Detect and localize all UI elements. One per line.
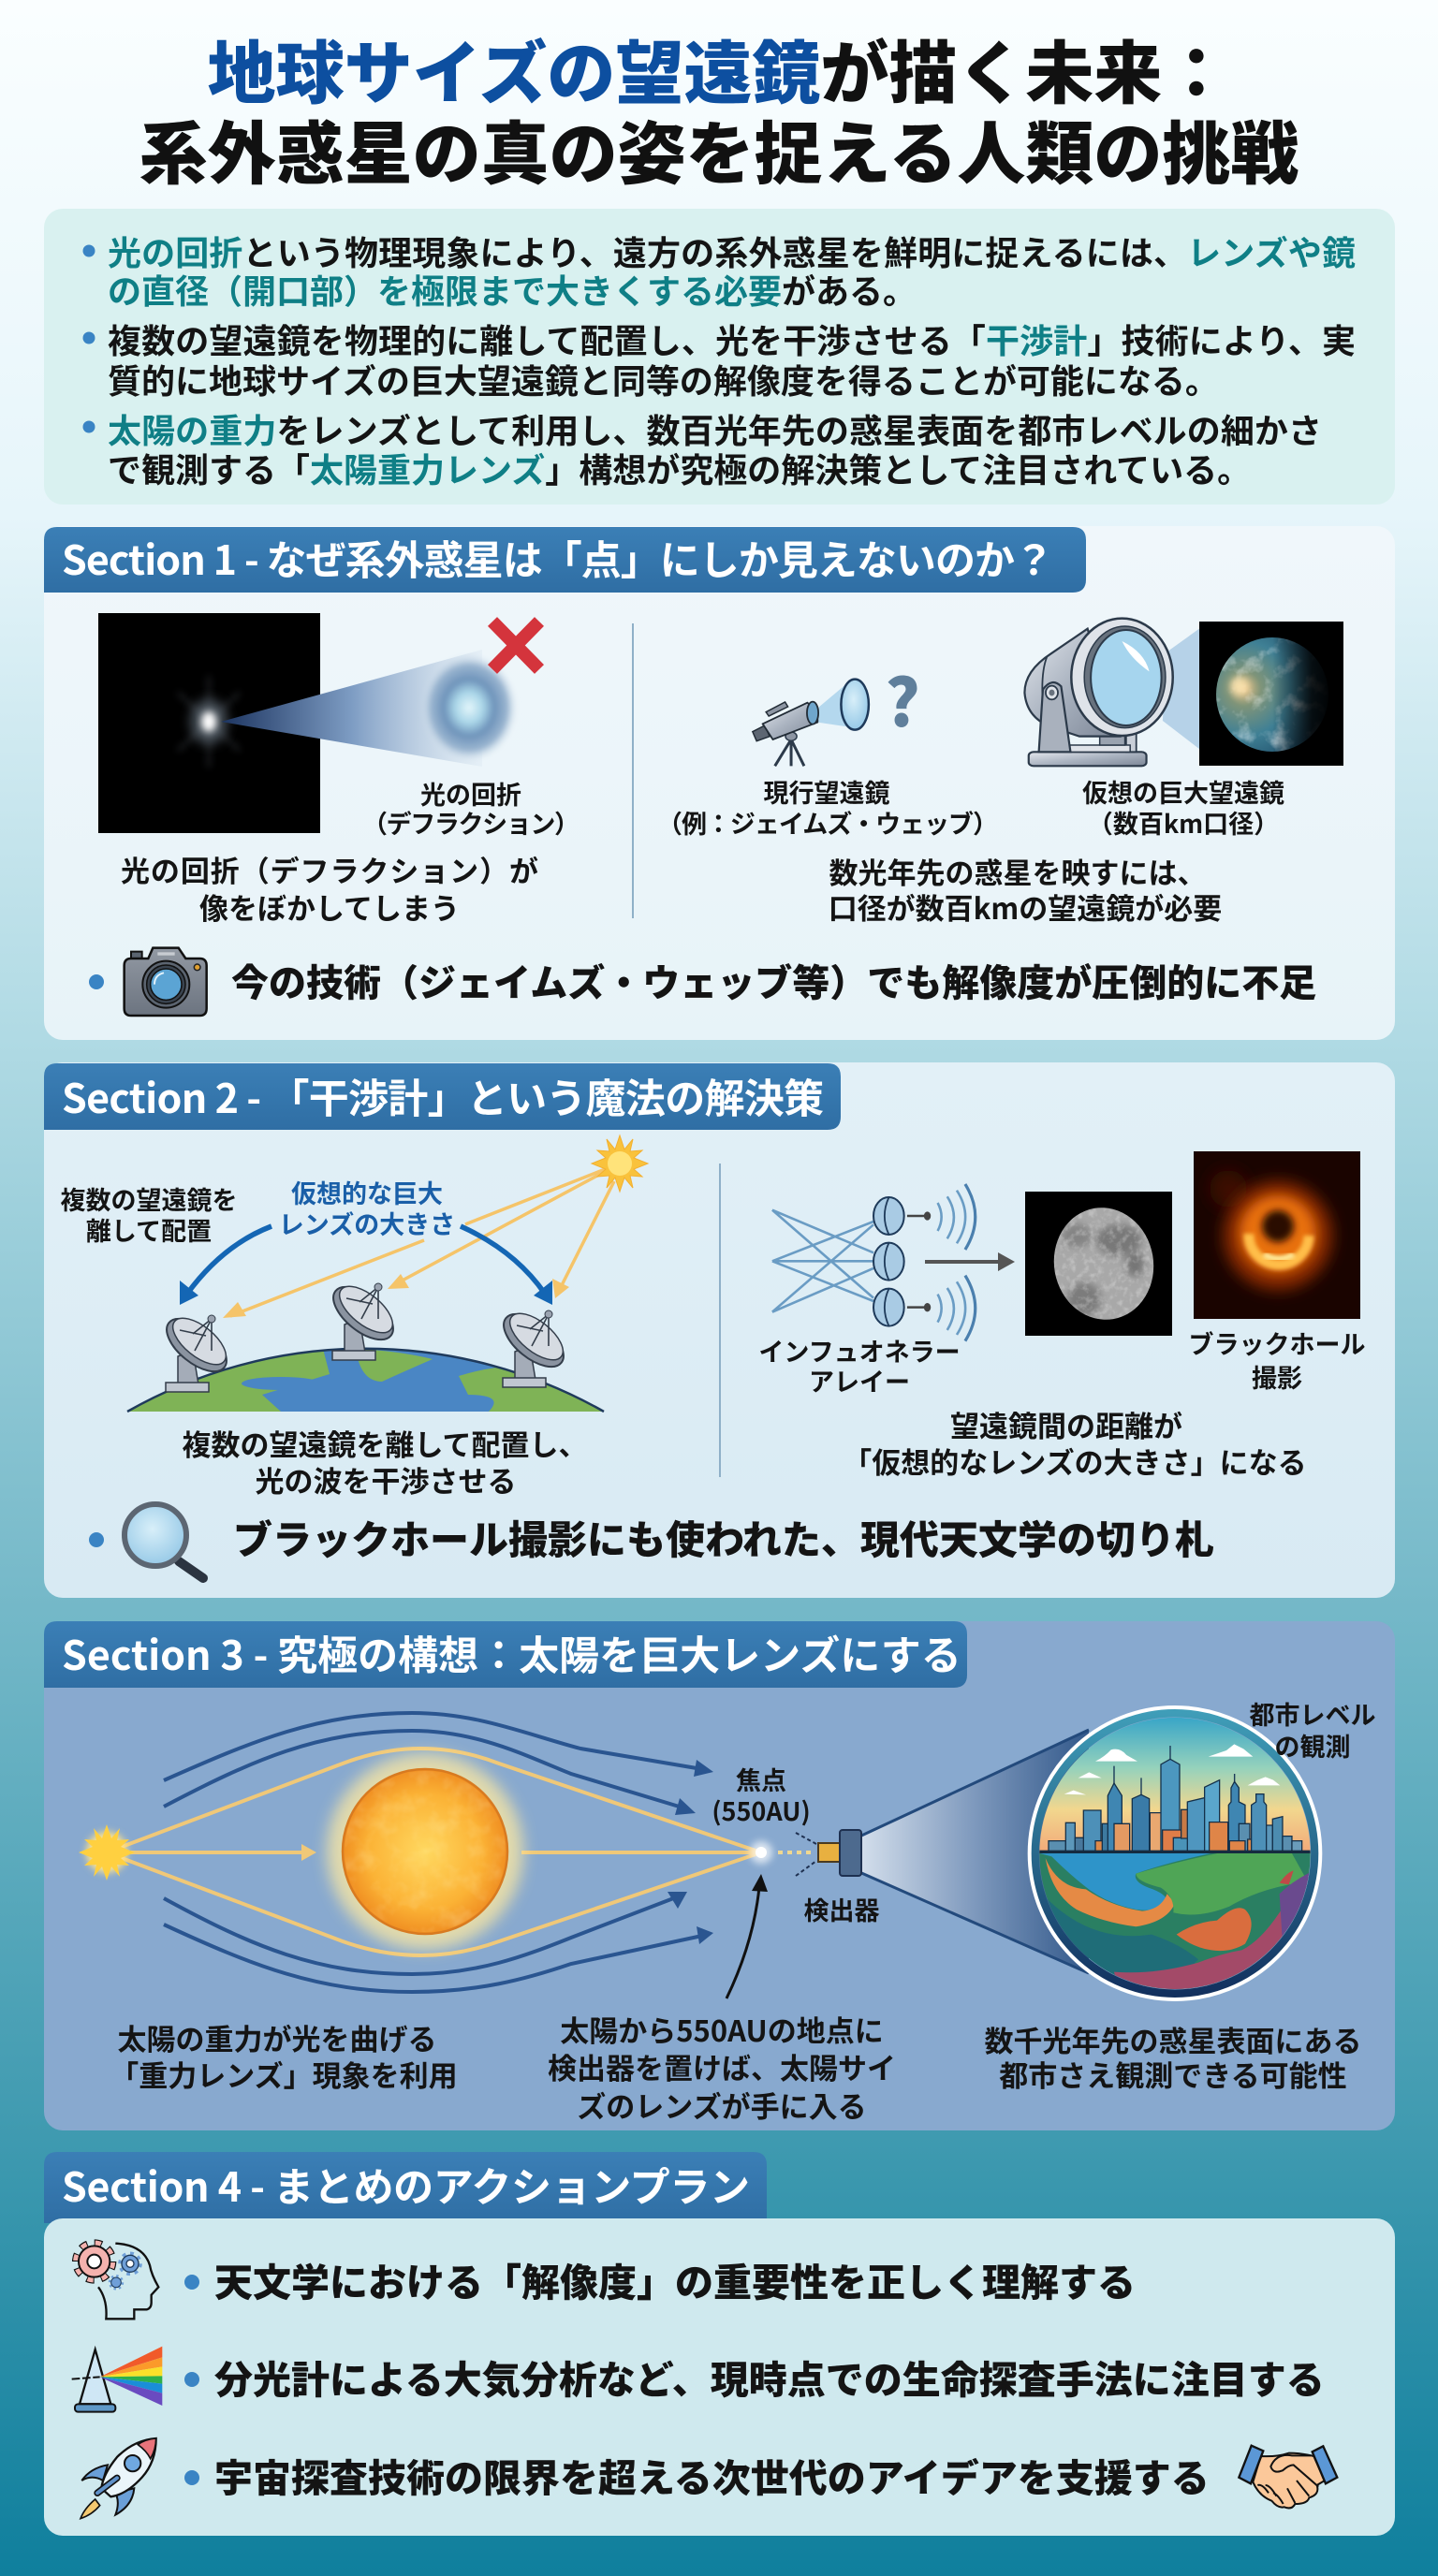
icon: small telescope bbox=[753, 680, 869, 766]
icon: rocket bbox=[81, 2438, 156, 2519]
icon: radio dish right bbox=[495, 1304, 572, 1387]
label: focal point bbox=[712, 1761, 811, 1828]
focal point bbox=[750, 1841, 772, 1864]
diffraction label: 光の回折 bbox=[420, 775, 521, 812]
caption: 550AU: 太陽から550AUの地点に bbox=[560, 2008, 884, 2050]
label: array: インフュオネラー bbox=[758, 1332, 961, 1368]
icon: red x bbox=[492, 622, 539, 669]
diffraction image bbox=[98, 613, 320, 833]
label: virtual lens: レンズの大きさ bbox=[279, 1205, 455, 1241]
panel: section 3 bbox=[44, 1621, 1395, 2130]
telescope labels: 現行望遠鏡 bbox=[764, 773, 889, 810]
icon: handshake bbox=[1239, 2446, 1337, 2508]
caption: 550AU bbox=[548, 2008, 896, 2126]
label: city level: 都市レベル bbox=[1249, 1695, 1376, 1732]
panel: section 2 bbox=[44, 1062, 1395, 1598]
caption: 550AU: ズのレンズが手に入る bbox=[577, 2084, 867, 2126]
left caption: 像をぼかしてしまう bbox=[199, 886, 460, 928]
label: telescopes separated: 複数の望遠鏡を bbox=[60, 1180, 238, 1217]
summary bullet 2: 複数の望遠鏡を物理的に離して配置し、光を干渉させる「干渉計」技術により、実 bbox=[108, 315, 1356, 363]
left caption: 複数の望遠鏡を離して配置し、 bbox=[182, 1422, 588, 1464]
right caption: 「仮想的なレンズの大きさ」になる bbox=[843, 1440, 1307, 1482]
section 4 heading: Section 4 - まとめのアクションプラン bbox=[62, 2156, 750, 2214]
right caption: 望遠鏡間の距離が bbox=[950, 1403, 1182, 1445]
starlight rays bbox=[223, 1168, 614, 1318]
curved arrows bbox=[180, 1226, 552, 1305]
icon: radio dish center bbox=[325, 1277, 402, 1360]
label: black hole: ブラックホール bbox=[1189, 1325, 1365, 1361]
caption: 550AU: 検出器を置けば、太陽サイ bbox=[548, 2045, 896, 2087]
icon: magnifier bbox=[125, 1504, 203, 1578]
giant telescope labels bbox=[1082, 773, 1284, 841]
title: 地球サイズの望遠鏡が描く未来： bbox=[208, 19, 1230, 118]
summary bullet 3 bbox=[82, 404, 1322, 492]
right caption: 数光年先の惑星を映すには、 bbox=[829, 850, 1206, 892]
detector bbox=[778, 1830, 861, 1876]
label: virtual lens: 仮想的な巨大 bbox=[291, 1174, 443, 1210]
black hole image bbox=[1194, 1151, 1360, 1319]
icon: radio dish left bbox=[158, 1309, 235, 1392]
summary bullet 2: 質的に地球サイズの巨大望遠鏡と同等の解像度を得ることが可能になる。 bbox=[108, 355, 1219, 403]
key point 2: ブラックホール撮影にも使われた、現代天文学の切り札 bbox=[233, 1509, 1214, 1566]
left caption bbox=[182, 1422, 588, 1500]
right caption bbox=[843, 1403, 1307, 1482]
label: focal point: 焦点 bbox=[736, 1761, 786, 1797]
summary bullet 1: の直径（開口部）を極限まで大きくする必要がある。 bbox=[108, 265, 917, 314]
telescope labels bbox=[657, 773, 998, 841]
telescope labels: （例：ジェイムズ・ウェッブ） bbox=[657, 804, 998, 841]
label: array: アレイー bbox=[809, 1362, 910, 1398]
left caption: 光の回折（デフラクション）が bbox=[121, 848, 538, 890]
label: virtual lens bbox=[279, 1174, 455, 1241]
caption: gravity: 「重力レンズ」現象を利用 bbox=[110, 2053, 458, 2095]
action 3: 宇宙探査技術の限界を超える次世代のアイデアを支援する bbox=[214, 2447, 1210, 2503]
label: detector: 検出器 bbox=[803, 1891, 880, 1927]
title: 系外惑星の真の姿を捉える人類の挑戦 bbox=[139, 99, 1299, 198]
giant telescope labels: 仮想の巨大望遠鏡 bbox=[1082, 773, 1284, 810]
label: telescopes separated bbox=[60, 1180, 238, 1248]
interferometer array bbox=[772, 1184, 976, 1341]
panel: section 4 bbox=[44, 2152, 1395, 2536]
label: black hole: 撮影 bbox=[1252, 1358, 1302, 1395]
icon: head with gears bbox=[76, 2244, 158, 2319]
summary bullet 2 bbox=[82, 315, 1356, 403]
action 3 bbox=[81, 2438, 1337, 2519]
panel: summary bbox=[44, 209, 1395, 505]
label: focal point: (550AU) bbox=[712, 1792, 811, 1828]
planet image bbox=[1199, 622, 1343, 766]
key point 2 bbox=[89, 1504, 1214, 1578]
key point 1: 今の技術（ジェイムズ・ウェッブ等）でも解像度が圧倒的に不足 bbox=[231, 953, 1316, 1007]
moon image bbox=[1025, 1192, 1172, 1336]
question mark: ? bbox=[885, 651, 920, 746]
label: black hole bbox=[1189, 1325, 1365, 1395]
label: city level: の観測 bbox=[1275, 1727, 1350, 1764]
action 1: 天文学における「解像度」の重要性を正しく理解する bbox=[214, 2251, 1136, 2307]
action 2: 分光計による大気分析など、現時点での生命探査手法に注目する bbox=[214, 2349, 1325, 2405]
giant telescope labels: （数百km口径） bbox=[1088, 804, 1279, 841]
icon: source star bbox=[79, 1824, 135, 1881]
right caption: 口径が数百kmの望遠鏡が必要 bbox=[829, 886, 1222, 928]
right caption bbox=[829, 850, 1222, 928]
diffraction label: （デフラクション） bbox=[362, 804, 580, 841]
caption: gravity bbox=[110, 2016, 458, 2095]
summary bullet 3: 太陽の重力をレンズとして利用し、数百光年先の惑星表面を都市レベルの細かさ bbox=[108, 404, 1322, 453]
section 1 heading: Section 1 - なぜ系外惑星は「点」にしか見えないのか？ bbox=[62, 529, 1054, 587]
section 2 heading: Section 2 - 「干渉計」という魔法の解決策 bbox=[62, 1067, 824, 1125]
panel: section 1 bbox=[44, 526, 1395, 1040]
summary bullet 1 bbox=[82, 227, 1356, 314]
action 1 bbox=[76, 2244, 1136, 2319]
gravitationally bent rays bbox=[107, 1713, 761, 1992]
light cone and blurred ring bbox=[221, 650, 518, 767]
label: telescopes separated: 離して配置 bbox=[86, 1211, 212, 1248]
icon: giant telescope bbox=[1024, 619, 1199, 766]
left caption: 光の波を干渉させる bbox=[255, 1458, 517, 1500]
label: city level bbox=[1249, 1695, 1376, 1764]
title bbox=[139, 19, 1299, 198]
summary bullet 1: 光の回折という物理現象により、遠方の系外惑星を鮮明に捉えるには、レンズや鏡 bbox=[108, 227, 1356, 275]
central ray bbox=[107, 1844, 761, 1861]
label: array bbox=[758, 1332, 961, 1398]
icon: camera bbox=[125, 948, 207, 1016]
caption: city bbox=[985, 2018, 1361, 2095]
icon: prism bbox=[72, 2347, 162, 2412]
section 3 heading: Section 3 - 究極の構想：太陽を巨大レンズにする bbox=[62, 1624, 961, 1682]
diffraction label bbox=[362, 775, 580, 841]
planet with city bbox=[1030, 1707, 1320, 1999]
sun bbox=[327, 1753, 523, 1950]
callout arrow bbox=[726, 1874, 768, 1998]
summary bullet 3: で観測する「太陽重力レンズ」構想が究極の解決策として注目されている。 bbox=[108, 444, 1251, 492]
left caption bbox=[121, 848, 538, 928]
cone of view bbox=[859, 1730, 1089, 1973]
earth bbox=[127, 1349, 604, 1412]
caption: city: 都市さえ観測できる可能性 bbox=[999, 2053, 1347, 2095]
icon: star bbox=[592, 1135, 648, 1192]
arrow bbox=[925, 1252, 1015, 1271]
caption: gravity: 太陽の重力が光を曲げる bbox=[118, 2016, 436, 2058]
caption: city: 数千光年先の惑星表面にある bbox=[985, 2018, 1361, 2060]
